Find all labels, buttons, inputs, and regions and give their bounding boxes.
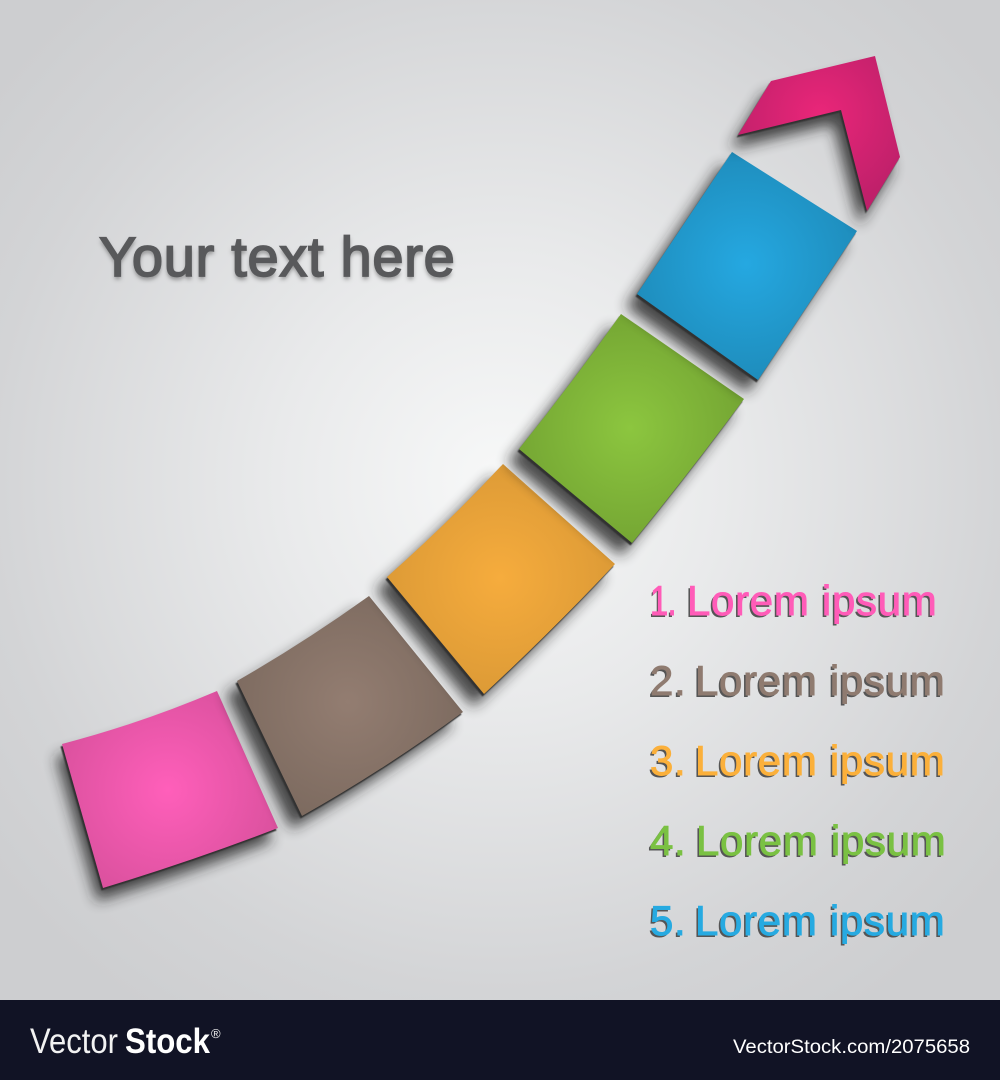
- step 2: brown square: [226, 596, 463, 829]
- list item 3: 3.: [650, 737, 686, 784]
- title: Your text here: [99, 225, 455, 288]
- footer bar: Stock: [125, 1022, 210, 1061]
- list item 4: 4.: [650, 817, 686, 864]
- list item 5: 5.: [650, 897, 686, 944]
- step 5: blue square: [626, 152, 857, 393]
- list item 1: 1.: [650, 577, 676, 624]
- list item 4: Lorem ipsum: [696, 817, 946, 864]
- step 1: pink square: [56, 691, 278, 901]
- step 3: orange square: [376, 464, 615, 707]
- footer bar: Vector: [30, 1022, 118, 1061]
- footer bar: VectorStock.com/2075658: [733, 1037, 970, 1058]
- list item 3: Lorem ipsum: [695, 737, 945, 784]
- list item 5: Lorem ipsum: [695, 897, 945, 944]
- list item 2: Lorem ipsum: [695, 657, 945, 704]
- footer bar: ®: [211, 1026, 221, 1041]
- arrow head: [730, 56, 900, 225]
- footer bar: [0, 1000, 1000, 1080]
- step 4: green square: [508, 314, 744, 556]
- list item 1: Lorem ipsum: [687, 577, 937, 624]
- list item 2: 2.: [650, 657, 686, 704]
